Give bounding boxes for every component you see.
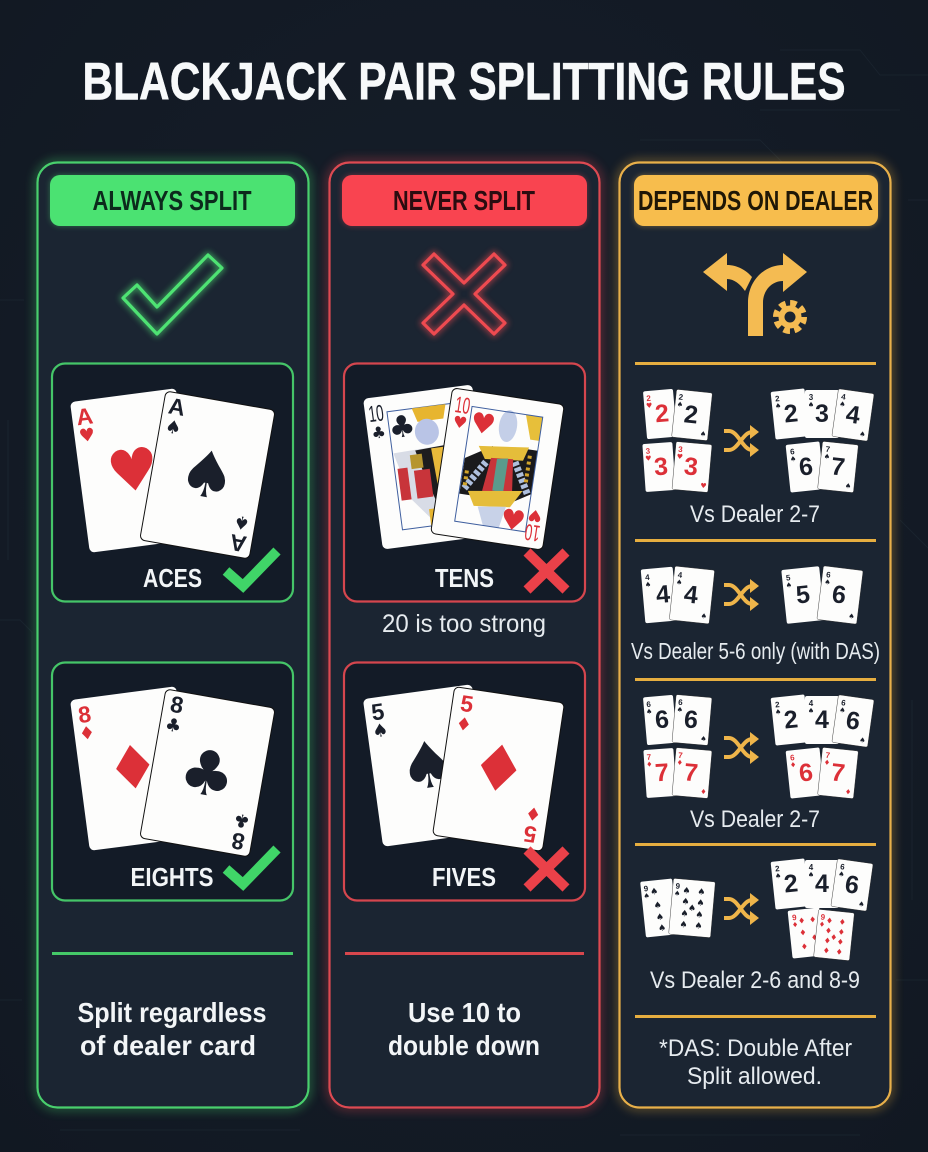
dealer cards: 4: [844, 400, 862, 430]
card pairs: 3: [645, 447, 651, 456]
header: always split: ALWAYS SPLIT: [92, 185, 252, 216]
card: eight of diamonds: 8: [76, 701, 93, 728]
card pair: ♠: [695, 910, 704, 921]
card: five of diamonds: ♦: [524, 802, 543, 825]
card: king of clubs: 10: [367, 399, 385, 427]
dealer cards: 6: [826, 570, 832, 580]
card box: aces: [52, 364, 293, 602]
card pair: 4: [655, 580, 671, 609]
card: queen of hearts: ♥: [498, 502, 528, 539]
card: ace of spades: ♠: [163, 416, 183, 440]
icon: X: [527, 850, 566, 888]
label: eights: EIGHTS: [130, 862, 214, 892]
note: 20 is too strong: 20 is too strong: [382, 610, 546, 638]
card pairs: ♥: [645, 455, 652, 463]
card: king of clubs: ♣: [370, 422, 387, 443]
card pair: ♠: [674, 889, 681, 898]
card: queen of hearts: 10: [453, 391, 472, 419]
card pair: ♠: [682, 886, 691, 897]
card pair: ♠: [658, 923, 667, 934]
card pair: ♠: [656, 913, 665, 923]
label: tens: TENS: [435, 563, 494, 593]
card pairs: [642, 389, 712, 492]
panel: always split: [38, 162, 308, 1108]
card: eight of clubs: 8: [168, 691, 186, 719]
header: never split: [342, 175, 587, 226]
card: five of spades: 5: [370, 698, 386, 726]
dealer cards: ♦: [838, 917, 846, 927]
card: eight of clubs: ♣: [232, 808, 252, 832]
dealer cards: ♠: [808, 871, 814, 879]
footnote: DAS: *DAS: Double After: [659, 1035, 852, 1062]
card: five of diamonds: 5: [459, 690, 475, 717]
dealer cards: 2: [783, 869, 799, 899]
card: ace of hearts: [70, 388, 196, 553]
dealer cards: ♠: [859, 430, 866, 439]
card: king of clubs: ♣: [387, 408, 418, 447]
note: use 10 to double down: double down: [388, 1030, 540, 1061]
label: vs dealer 2-6 and 8-9: Vs Dealer 2-6 and 8-9: [650, 967, 860, 994]
dealer cards: 2: [775, 394, 781, 403]
dealer cards: 7: [825, 445, 831, 454]
dealer cards: ♦: [800, 942, 808, 952]
dealer cards: ♠: [858, 900, 865, 909]
card: ace of spades: A: [166, 392, 187, 421]
dealer cards: ♠: [785, 581, 792, 590]
arrow: shuffle: [724, 425, 759, 457]
card: five of spades: ♠: [394, 726, 461, 807]
card: queen of hearts: [431, 388, 564, 550]
dealer cards: ♦: [799, 928, 807, 938]
card pair: 9: [675, 882, 681, 891]
label: fives: FIVES: [432, 862, 496, 892]
dealer cards: ♦: [837, 927, 845, 937]
card pair: ♠: [653, 901, 662, 912]
card: queen of hearts: 10: [523, 519, 542, 547]
card pair: ♠: [681, 897, 690, 908]
dealer cards: 2: [775, 700, 781, 709]
dealer cards: ♦: [823, 936, 831, 946]
card pair: ♠: [687, 904, 696, 914]
dealer cards: ♦: [824, 926, 832, 936]
header: depends on dealer: [634, 175, 878, 226]
dealer cards: 4: [841, 392, 847, 402]
header: always split: [50, 175, 295, 226]
card: king of clubs: [363, 384, 492, 550]
dealer cards: ♦: [825, 916, 833, 926]
card: eight of clubs: [140, 689, 275, 857]
card: ace of hearts: A: [75, 402, 94, 430]
footnote: DAS: Split allowed.: [687, 1063, 822, 1090]
card pairs: 6: [678, 698, 684, 707]
icon: X: [527, 552, 566, 590]
dealer cards: 7: [825, 751, 831, 760]
card: five of diamonds: ♦: [465, 729, 532, 811]
card pair: ♠: [700, 612, 707, 621]
panel: depends on dealer: [620, 162, 890, 1108]
dealer cards: 6: [840, 862, 846, 872]
label: vs dealer 2-7: Vs Dealer 2-7: [690, 806, 820, 833]
dealer cards: ♠: [845, 482, 852, 490]
icon: outlined X: [423, 254, 505, 334]
card pairs: 2: [683, 400, 699, 430]
card: ace of spades: A: [228, 529, 249, 558]
card pairs: ♦: [676, 759, 683, 767]
dealer cards: ♠: [839, 400, 846, 409]
panel: never split: [330, 162, 600, 1108]
card: eight of clubs: 8: [229, 827, 247, 855]
card pairs: 6: [654, 705, 670, 734]
footnote: DAS: [659, 1035, 852, 1090]
card pair: ♠: [694, 921, 703, 932]
card pair: 4: [645, 573, 651, 582]
card pair: [641, 566, 715, 624]
dealer cards: ♠: [824, 578, 831, 587]
dealer cards: ♠: [839, 706, 846, 715]
dealer cards: ♦: [798, 916, 806, 926]
header: never split: NEVER SPLIT: [393, 185, 535, 216]
card pairs: ♦: [700, 788, 707, 796]
card pairs: 7: [646, 753, 652, 762]
row: pairs of 6s and 7s: [643, 694, 874, 833]
row: pairs of 2s and 3s: [642, 388, 874, 528]
note: split regardless: of dealer card: [80, 1030, 256, 1061]
card pair: ♠: [650, 887, 659, 898]
row: pair of 9s: [640, 858, 873, 994]
dealer cards: [771, 858, 873, 961]
card pair: 9: [643, 884, 649, 893]
dealer cards: 6: [790, 753, 796, 762]
dealer cards: 3: [815, 400, 829, 428]
card: five of diamonds: ♦: [454, 713, 473, 736]
icon: check: [226, 849, 277, 884]
card pairs: ♠: [700, 430, 707, 439]
card pairs: 2: [678, 393, 684, 402]
dealer cards: 7: [830, 452, 846, 482]
arrow: shuffle: [724, 579, 759, 611]
card: eight of clubs: ♣: [163, 714, 183, 738]
card pairs: ♠: [700, 735, 707, 743]
card: five of spades: ♠: [371, 720, 390, 743]
card: ace of spades: [140, 391, 275, 559]
dealer cards: 2: [775, 864, 781, 873]
dealer cards: ♦: [818, 920, 826, 929]
card pairs: 7: [683, 758, 699, 787]
dealer cards: ♦: [836, 937, 844, 947]
card box: eights: [52, 662, 293, 900]
dealer cards: [781, 566, 863, 624]
dealer cards: [771, 388, 874, 493]
card box: tens: [344, 364, 585, 602]
card pairs: 3: [653, 452, 669, 481]
dealer cards: ♦: [810, 933, 819, 942]
row: pair of 4s: [631, 566, 880, 664]
card pairs: 7: [678, 751, 684, 760]
icon: forked arrows with gear: [703, 253, 807, 336]
dealer cards: [771, 694, 874, 799]
dealer cards: 6: [830, 580, 848, 610]
card: ace of hearts: ♥: [103, 433, 163, 508]
card pair: ♠: [697, 887, 706, 898]
dealer cards: 5: [795, 580, 811, 610]
dealer cards: ♠: [775, 872, 782, 881]
dealer cards: ♦: [792, 921, 799, 929]
card pair: [640, 878, 715, 938]
dealer cards: ♦: [822, 946, 830, 956]
card pairs: ♥: [700, 482, 707, 490]
card: ace of spades: ♠: [173, 435, 242, 517]
arrow: shuffle: [724, 893, 759, 925]
dealer cards: 2: [783, 705, 799, 735]
dealer cards: ♦: [845, 788, 852, 796]
dealer cards: ♠: [838, 870, 845, 879]
dealer cards: 6: [841, 698, 847, 708]
dealer cards: ♠: [808, 707, 814, 715]
card pairs: 3: [683, 452, 699, 481]
dealer cards: ♦: [835, 947, 843, 957]
dealer cards: ♦: [823, 758, 831, 767]
card pair: ♠: [679, 920, 688, 931]
dealer cards: 3: [809, 393, 814, 402]
card pairs: 6: [646, 700, 652, 709]
card pairs: ♠: [676, 400, 684, 409]
card pair: ♠: [680, 909, 689, 920]
dealer cards: 7: [830, 758, 846, 788]
card: eight of diamonds: ♦: [78, 722, 96, 745]
dealer cards: 9: [792, 913, 798, 922]
label: vs dealer 5-6 only: Vs Dealer 5-6 only (with DAS): [631, 638, 880, 664]
dealer cards: ♦: [809, 915, 817, 925]
dealer cards: ♠: [848, 612, 855, 621]
card: queen of hearts: ♥: [468, 406, 498, 442]
note: split regardless: Split regardless: [78, 997, 266, 1028]
card pairs: ♠: [676, 706, 683, 714]
dealer cards: 9: [820, 913, 826, 922]
card pairs: 3: [678, 445, 684, 454]
dealer cards: ♠: [775, 402, 782, 411]
dealer cards: ♠: [808, 401, 814, 409]
dealer cards: 6: [844, 706, 862, 736]
card pair: ♠: [676, 578, 683, 587]
card pairs: 2: [646, 394, 652, 403]
card pairs: ♥: [646, 402, 653, 410]
dealer cards: 5: [785, 573, 791, 583]
card pair: ♠: [645, 581, 652, 589]
card: ace of spades: ♠: [232, 510, 252, 534]
icon: outlined check mark: [123, 255, 222, 334]
card pairs: 6: [683, 705, 699, 734]
card pairs: ♦: [646, 761, 653, 769]
card: eight of diamonds: [70, 686, 196, 851]
card box: fives: [344, 662, 585, 900]
card: five of diamonds: [433, 687, 564, 851]
card pairs: 7: [654, 758, 670, 787]
label: vs dealer 2-7: Vs Dealer 2-7: [690, 501, 820, 528]
dealer cards: ♠: [790, 455, 797, 464]
card pairs: ♠: [646, 708, 653, 716]
dealer cards: 2: [783, 399, 799, 429]
note: use 10 to double down: [388, 997, 540, 1061]
card pairs: ♥: [676, 453, 683, 461]
card: ace of hearts: ♥: [78, 424, 96, 447]
card: eight of clubs: ♣: [174, 733, 241, 814]
card: queen of hearts: ♥: [526, 505, 543, 526]
dealer cards: 4: [809, 699, 814, 708]
dealer cards: 4: [815, 706, 829, 734]
icon: check: [226, 551, 277, 586]
note: split regardless: [78, 997, 266, 1061]
dealer cards: ♠: [775, 708, 782, 717]
dealer cards: ♠: [859, 736, 866, 745]
dealer cards: 6: [798, 758, 814, 788]
card pairs: [643, 695, 712, 798]
dealer cards: 4: [815, 870, 829, 898]
arrow: shuffle: [724, 732, 759, 764]
dealer cards: ♠: [823, 452, 831, 461]
card: five of spades: [363, 684, 492, 847]
dealer cards: 6: [843, 870, 861, 900]
card: five of diamonds: 5: [522, 821, 538, 848]
card pair: ♠: [643, 892, 650, 901]
dealer cards: ♦: [790, 761, 797, 770]
card pair: ♠: [696, 898, 705, 909]
card pair: 4: [683, 580, 699, 610]
card: queen of hearts: ♥: [452, 412, 469, 433]
dealer cards: 6: [790, 447, 796, 456]
dealer cards: 4: [809, 863, 814, 872]
dealer cards: ♦: [830, 933, 838, 942]
card: eight of diamonds: ♦: [102, 730, 164, 807]
card pair: 4: [677, 570, 683, 580]
card pairs: 2: [654, 399, 670, 428]
label: aces: ACES: [143, 563, 202, 593]
note: use 10 to double down: Use 10 to: [408, 997, 521, 1028]
dealer cards: 6: [798, 452, 814, 482]
